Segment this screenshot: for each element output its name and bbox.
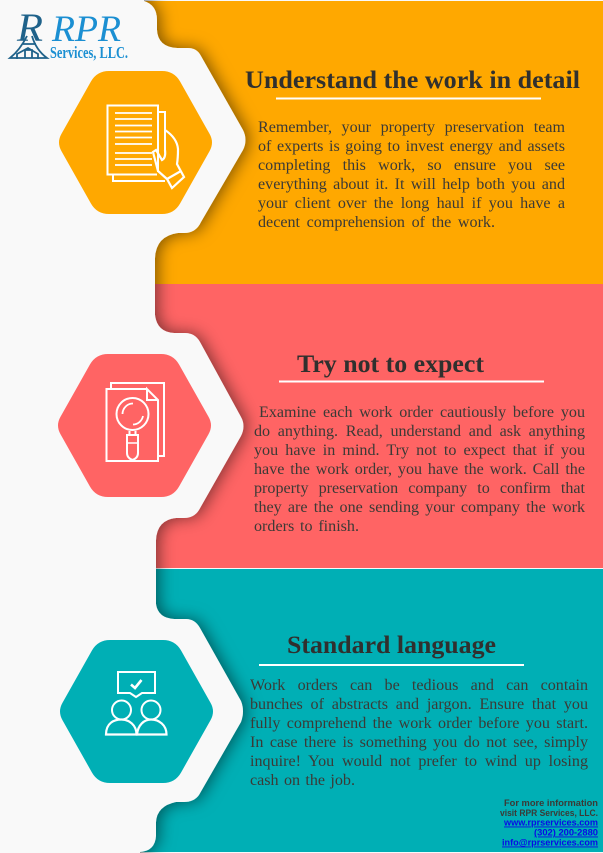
text block: understand the work: your client over the long haul if you have a — [258, 195, 565, 212]
white notched left column — [0, 0, 246, 853]
text block: understand the work — [258, 119, 565, 231]
heading: try not to expect: Try not to expect — [297, 351, 485, 378]
text block: try not to expect: orders to finish. — [254, 518, 359, 535]
heading underline three — [259, 664, 524, 666]
text block: try not to expect: do anything. Read, understand and ask anything — [254, 423, 585, 440]
text block: understand the work: Remember, your property preservation team — [258, 119, 565, 136]
text block: standard language: Work orders can be tedious and can contain — [250, 677, 588, 694]
hexagon: orange document icon — [59, 71, 212, 214]
text block: standard language: cash on the job. — [250, 772, 355, 789]
footer link: email: info@rprservices.com — [502, 838, 598, 848]
footer line: visit: visit RPR Services, LLC. — [500, 808, 598, 818]
text block: try not to expect — [254, 404, 586, 535]
text block: try not to expect: Examine each work order cautiously before you — [259, 404, 585, 421]
hexagon: teal people icon — [60, 640, 213, 783]
logo wordmark services: Services, LLC. — [50, 43, 128, 62]
heading underline one — [276, 98, 541, 100]
footer contact block — [500, 798, 598, 848]
panel: teal background — [120, 569, 603, 852]
text block: standard language: inquire! You would not prefer to wind up losing — [250, 753, 588, 770]
text block: standard language — [250, 677, 588, 789]
panel: red background — [120, 284, 603, 568]
text block: understand the work: decent comprehension of the work. — [258, 214, 495, 231]
text block: standard language: In case there is something you do not see, simply — [250, 734, 588, 751]
text block: try not to expect: you have in mind. Try not to expect that if you — [254, 442, 585, 459]
text block: understand the work: of experts is going to invest energy and assets — [258, 138, 565, 155]
text block: understand the work: completing this work, so ensure you see — [258, 157, 565, 174]
icon: magnifier over documents — [106, 383, 164, 461]
footer line: for more information: For more information — [504, 798, 598, 808]
text block: try not to expect: they are the one sending your company the work — [254, 499, 585, 516]
footer link: phone: (302) 200-2880 — [534, 828, 598, 838]
text block: try not to expect: property preservation company to confirm that — [254, 480, 585, 497]
panel: orange background — [120, 1, 603, 284]
logo: RPR Services — [10, 5, 128, 62]
heading: standard language: Standard language — [287, 632, 496, 659]
icon: hand holding document — [108, 106, 184, 188]
heading: understand the work: Understand the work in detail — [245, 67, 580, 94]
text block: standard language: fully comprehend the work order before you start. — [250, 715, 588, 732]
logo emblem: house with R: R — [16, 5, 43, 50]
footer link: website: www.rprservices.com — [503, 818, 598, 828]
logo wordmark RPR: RPR — [51, 9, 121, 50]
text block: try not to expect: have the work order, you have the work. Call the — [254, 461, 585, 478]
hexagon: red search icon — [58, 354, 211, 497]
icon: two people with speech bubble — [106, 672, 166, 734]
heading underline two — [279, 380, 544, 382]
text block: standard language: bunches of abstracts and jargon. Ensure that you — [250, 696, 588, 713]
text block: understand the work: everything about it. It will help both you and — [258, 176, 565, 193]
